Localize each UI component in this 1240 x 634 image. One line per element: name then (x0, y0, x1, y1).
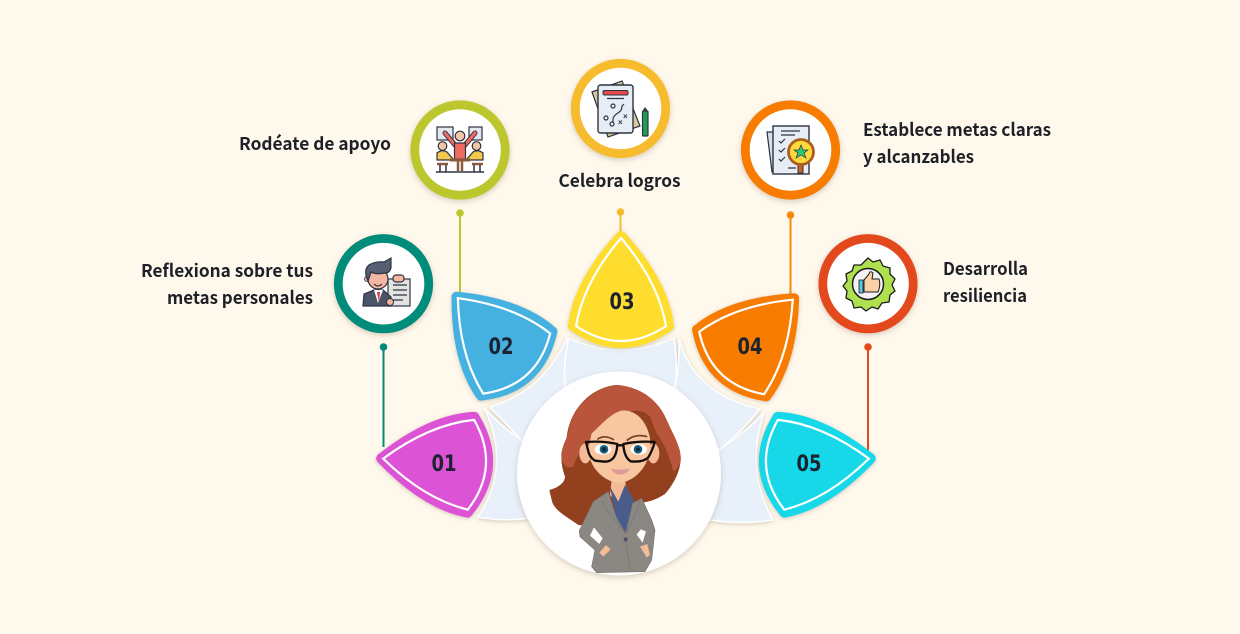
badge: step 01 icon, presenter with document (338, 239, 429, 329)
label: step 01: Reflexiona sobre tus (141, 258, 313, 283)
button (624, 537, 628, 541)
petal 02: 02 (488, 335, 514, 360)
badge: step 03 icon, strategy sheet and pencil (575, 63, 666, 154)
badge: step 02 icon, team meeting (415, 105, 505, 195)
petal 02 (421, 265, 564, 408)
brows (597, 436, 647, 441)
glasses (586, 442, 655, 462)
label: step 01 (141, 258, 313, 310)
hands (599, 544, 650, 557)
petal 05: 05 (796, 452, 822, 477)
petal 04: 04 (738, 335, 762, 360)
pale fan behind the numbered petals (478, 337, 773, 522)
hair back (549, 385, 681, 527)
connector: step 01 (380, 343, 387, 447)
label: step 05: Desarrolla (943, 256, 1028, 281)
label: step 02: Rodéate de apoyo (239, 131, 391, 156)
connector: step 04 (787, 211, 794, 298)
hair highlights (561, 385, 681, 472)
connector: step 05 (864, 343, 872, 452)
petal 05 (761, 411, 874, 514)
label: step 04: Establece metas claras (863, 117, 1051, 142)
petal 03 (573, 236, 669, 343)
label: step 01: metas personales (167, 285, 313, 310)
badge: step 04 icon, checklist and magnifier (745, 105, 836, 195)
petal 01 (378, 411, 491, 514)
badge: step 03 icon, strategy sheet and pencil: × (618, 118, 623, 127)
connector: step 03 (617, 208, 624, 234)
central white disc (517, 372, 721, 576)
label: step 05: resiliencia (943, 283, 1027, 308)
label: step 03: Celebra logros (558, 168, 681, 193)
ears (579, 443, 659, 463)
petal 01: 01 (432, 452, 456, 477)
petal 04 (685, 265, 829, 409)
blouse (610, 485, 634, 533)
petal 03: 03 (610, 290, 634, 315)
central character: woman with glasses and grey blazer (549, 385, 681, 573)
connector: step 02 (456, 209, 464, 295)
label: step 04 (863, 117, 1051, 169)
face (588, 411, 650, 483)
lapels (602, 500, 640, 570)
mouth (611, 469, 630, 475)
blazer (579, 492, 655, 573)
label: step 04: y alcanzables (863, 144, 974, 169)
arm gaps (590, 527, 646, 544)
badge: step 05 icon, thumbs-up seal (823, 239, 913, 329)
label: step 05 (943, 256, 1028, 308)
badge: step 03 icon, strategy sheet and pencil: × (623, 112, 628, 121)
neck (610, 480, 627, 503)
eyes (595, 444, 647, 455)
